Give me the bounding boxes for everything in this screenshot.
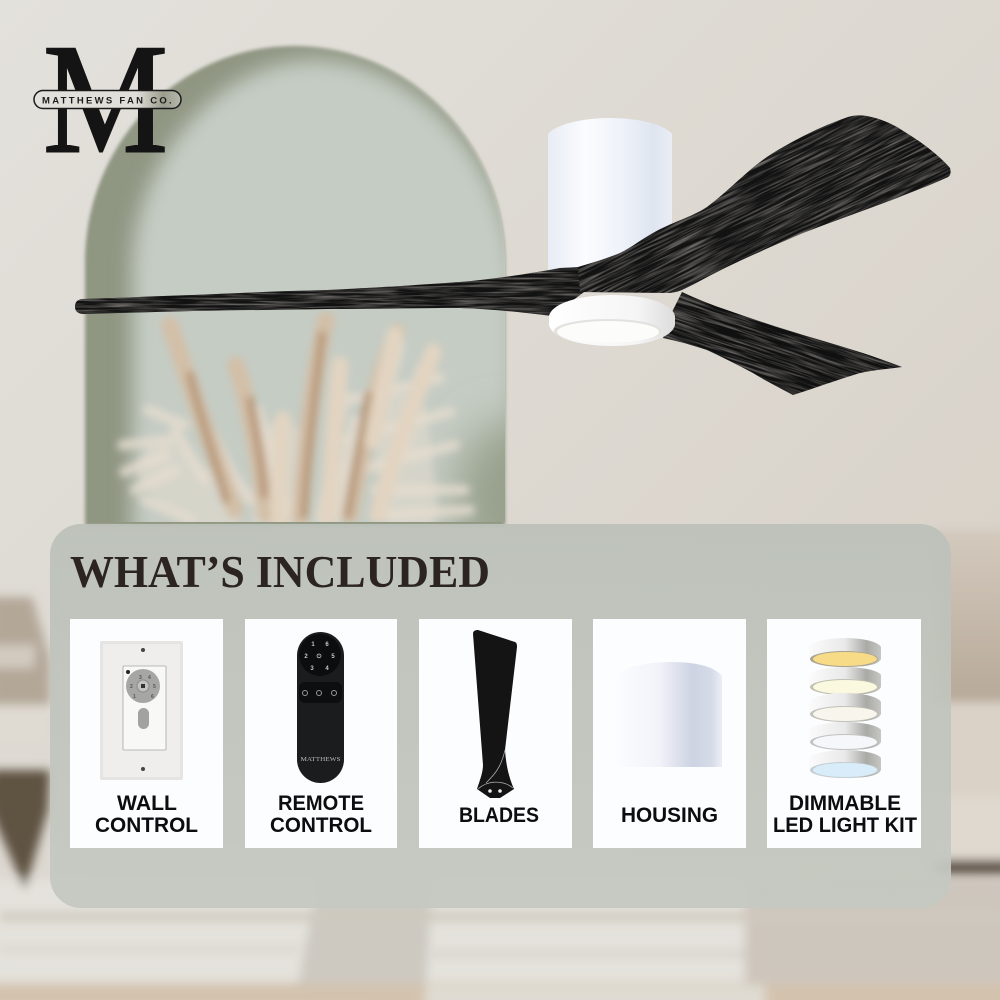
- card: wall control: [70, 619, 223, 848]
- label: WALL: [117, 792, 177, 815]
- label: HOUSING: [621, 804, 718, 827]
- icon: wall control: 1: [133, 694, 136, 700]
- fan housing cylinder: [548, 118, 672, 272]
- fan blade: left: [75, 267, 584, 316]
- arched wall niche: [82, 44, 507, 524]
- icon: remote: 2: [304, 654, 308, 660]
- card: LED light kit: [767, 619, 921, 848]
- icon: wall control: [100, 641, 183, 780]
- label: BLADES: [459, 804, 539, 827]
- icon: wall control: 3: [139, 675, 142, 681]
- icon: blade: [473, 630, 517, 798]
- fan blade: upper right: [578, 115, 951, 293]
- panel: what's included: [50, 524, 951, 908]
- icon: remote: 1: [311, 642, 315, 648]
- icon: housing: [617, 662, 722, 767]
- fan blade: lower right: [663, 292, 902, 395]
- ceiling fan product: [75, 115, 951, 395]
- icon: remote: 5: [331, 654, 335, 660]
- icon: wall control: 5: [153, 684, 156, 690]
- logo: Matthews Fan Co.: M: [43, 12, 168, 186]
- icon: wall control: 6: [151, 694, 154, 700]
- label: REMOTE: [278, 792, 364, 815]
- icon: remote: ⏻: [317, 653, 322, 660]
- icon: remote: 3: [310, 666, 314, 672]
- card: blades: [419, 619, 572, 848]
- heading: WHAT’S INCLUDED: [70, 546, 490, 597]
- card: housing: [593, 619, 746, 848]
- icon: LED pucks: [809, 638, 881, 778]
- card: LED light kit: LED LIGHT KIT: [773, 814, 917, 837]
- card: remote control: CONTROL: [270, 814, 372, 837]
- icon: wall control: 2: [130, 684, 133, 690]
- sofa and floor: [0, 530, 1000, 1000]
- LED light ring: [549, 295, 675, 346]
- icon: remote: [297, 632, 344, 783]
- label: DIMMABLE: [789, 792, 901, 815]
- icon: wall control: 4: [148, 675, 151, 681]
- card: wall control: CONTROL: [95, 814, 198, 837]
- icon: remote: 6: [325, 642, 329, 648]
- card: remote control: [245, 619, 397, 848]
- logo: Matthews Fan Co.: MATTHEWS FAN CO.: [42, 96, 173, 106]
- icon: remote: 4: [325, 666, 329, 672]
- pampas grass: [122, 320, 470, 520]
- icon: remote: MATTHEWS: [300, 756, 341, 763]
